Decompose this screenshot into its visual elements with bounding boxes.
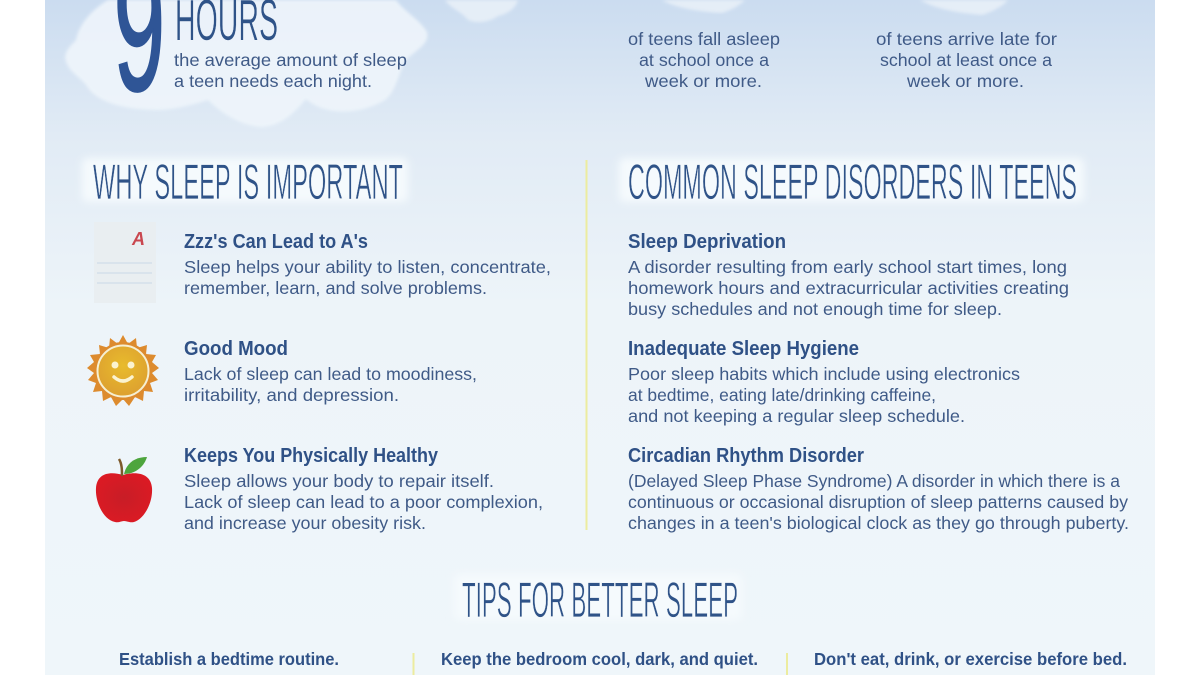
text: nine hours description bbox=[174, 50, 407, 91]
item: sleep deprivation: Sleep Deprivation bbox=[628, 231, 786, 253]
item: physically healthy: Keeps You Physically Healthy bbox=[184, 445, 439, 467]
item: physically healthy: Lack of sleep can lead to a poor complexion, bbox=[184, 492, 543, 512]
text: stat arrive late: week or more. bbox=[906, 71, 1024, 91]
cloud: stat one bbox=[662, 0, 745, 13]
item: physically healthy: and increase your obesity risk. bbox=[184, 513, 426, 533]
tip divider left bbox=[412, 653, 414, 675]
text: stat fall asleep: at school once a bbox=[639, 50, 769, 70]
item: physically healthy: Sleep allows your body to repair itself. bbox=[184, 471, 494, 491]
item: sleep deprivation: homework hours and extracurricular activities creating bbox=[628, 278, 1069, 298]
item: sleep deprivation: busy schedules and not enough time for sleep. bbox=[628, 299, 1002, 319]
icon: smiling sun bbox=[87, 335, 159, 406]
heading: tips for better sleep bbox=[454, 572, 742, 628]
tip divider right bbox=[786, 653, 788, 675]
heading: why sleep is important bbox=[82, 154, 408, 210]
text: nine hours description: a teen needs each night. bbox=[174, 71, 372, 91]
item: zzz: Zzz's Can Lead to A's bbox=[184, 231, 368, 253]
item: zzz bbox=[184, 231, 551, 298]
item: inadequate sleep hygiene: and not keeping a regular sleep schedule. bbox=[628, 406, 965, 426]
cloud: nine hours bbox=[65, 0, 427, 127]
item: inadequate sleep hygiene: Inadequate Sleep Hygiene bbox=[628, 338, 859, 360]
panel: common sleep disorders bbox=[628, 231, 1129, 533]
icon: apple bbox=[96, 457, 152, 522]
tip: bedroom: Keep the bedroom cool, dark, and quiet. bbox=[441, 649, 758, 669]
text: TIPS FOR BETTER SLEEP bbox=[462, 572, 738, 628]
text: stat arrive late: school at least once a bbox=[880, 50, 1052, 70]
item: good mood: irritability, and depression. bbox=[184, 385, 399, 405]
text: stat fall asleep: of teens fall asleep bbox=[628, 29, 780, 49]
tip: before bed: Don't eat, drink, or exercise before bed. bbox=[814, 649, 1127, 669]
text: nine hours description: the average amount of sleep bbox=[174, 50, 407, 70]
cloud: small bbox=[445, 0, 518, 22]
item: sleep deprivation: A disorder resulting from early school start times, long bbox=[628, 257, 1067, 277]
item: circadian rhythm disorder: Circadian Rhythm Disorder bbox=[628, 445, 864, 467]
text: stat arrive late bbox=[876, 29, 1057, 91]
item: circadian rhythm disorder: (Delayed Sleep Phase Syndrome) A disorder in which there is a bbox=[628, 471, 1120, 491]
item: inadequate sleep hygiene: Poor sleep habits which include using electronics bbox=[628, 364, 1020, 384]
item: inadequate sleep hygiene bbox=[628, 338, 1020, 426]
item: circadian rhythm disorder: changes in a teen's biological clock as they go through puberty. bbox=[628, 513, 1129, 533]
item: zzz: Sleep helps your ability to listen, concentrate, bbox=[184, 257, 551, 277]
item: good mood: Good Mood bbox=[184, 338, 288, 360]
text: WHY SLEEP IS IMPORTANT bbox=[93, 154, 403, 210]
item: good mood: Lack of sleep can lead to moodiness, bbox=[184, 364, 477, 384]
divider bbox=[586, 160, 588, 530]
icon: graded paper bbox=[94, 222, 156, 303]
cloud: stat two bbox=[920, 0, 1008, 15]
item: good mood bbox=[184, 338, 477, 405]
text: stat fall asleep bbox=[628, 29, 780, 91]
icon: graded paper: A bbox=[131, 229, 145, 249]
panel: why sleep is important bbox=[87, 222, 551, 533]
text: stat fall asleep: week or more. bbox=[644, 71, 762, 91]
tip: bedtime routine: Establish a bedtime routine. bbox=[119, 649, 339, 669]
item: physically healthy bbox=[184, 445, 543, 533]
item: zzz: remember, learn, and solve problems. bbox=[184, 278, 487, 298]
item: circadian rhythm disorder bbox=[628, 445, 1129, 533]
item: sleep deprivation bbox=[628, 231, 1069, 319]
item: inadequate sleep hygiene: at bedtime, eating late/drinking caffeine, bbox=[628, 385, 936, 405]
item: circadian rhythm disorder: continuous or occasional disruption of sleep patterns caused by bbox=[628, 492, 1128, 512]
text: stat arrive late: of teens arrive late for bbox=[876, 29, 1057, 49]
